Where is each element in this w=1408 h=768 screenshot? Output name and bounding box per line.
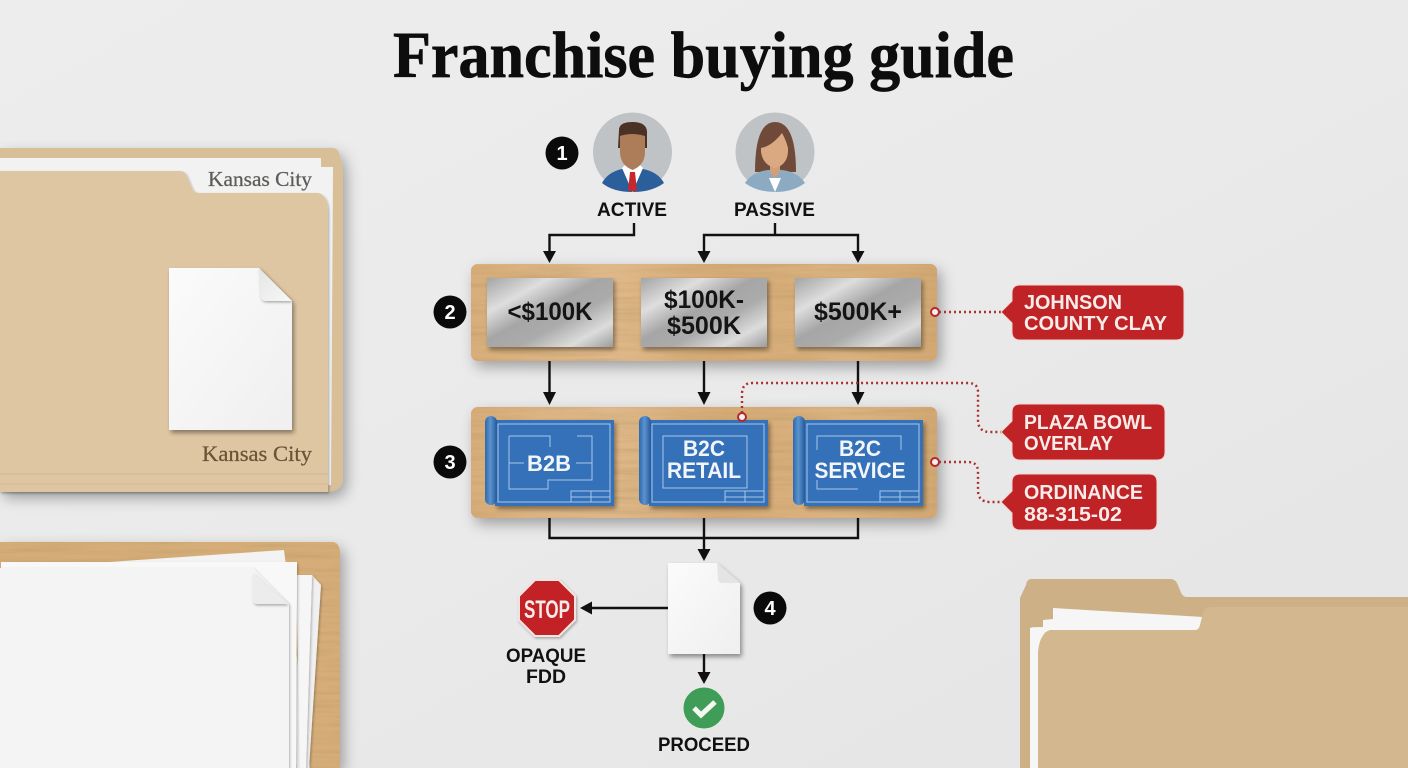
wooden board [471,407,937,518]
callout: Plaza Bowl Overlay: PLAZA BOWL [1024,411,1152,434]
connector dot: model board [931,458,939,466]
callout: Johnson County Clay: JOHNSON [1024,291,1122,314]
connector dot: B2C retail [738,413,746,421]
number badge 4 [754,592,786,624]
arrow: document to stop [580,602,668,614]
blueprint: B2C service [793,416,923,506]
folder tab label: Kansas City [208,167,313,191]
dotted connector: Plaza Bowl Overlay [742,383,1002,432]
icon: active investor avatar [593,112,672,192]
plate: 100K to 500K: $100K- [664,286,744,314]
label: active: ACTIVE [597,199,667,221]
step 4: document decision [506,563,786,756]
blueprint: B2C retail: B2C [683,436,725,461]
step 3: business model board [434,407,937,561]
label: passive: PASSIVE [734,199,815,221]
blueprint: B2C retail [639,416,768,506]
arrows: tiers to business models [543,361,864,405]
plate: under 100K [487,278,613,347]
label: opaque FDD [506,645,586,688]
callout: Johnson County Clay [1001,285,1184,340]
dotted connector: Ordinance [939,462,1002,502]
step 2: investment tier board [434,264,937,405]
arrows: passive to upper tiers [698,223,864,263]
panel: bottom-right manila folder [1020,579,1408,768]
callout: Ordinance 88-315-02 [1001,474,1157,530]
callout: Plaza Bowl Overlay: OVERLAY [1024,432,1113,455]
label: opaque FDD: OPAQUE [506,645,586,667]
plate: 500K plus: $500K+ [814,298,902,326]
number badge 1: 1 [556,143,568,165]
callout: Johnson County Clay: COUNTY CLAY [1024,312,1167,335]
arrow: active to under 100K [543,223,634,263]
callout: Ordinance 88-315-02: ORDINANCE [1024,481,1143,504]
step 1: investor type [543,112,864,263]
callout: Ordinance 88-315-02: 88-315-02 [1024,503,1122,526]
plate: 100K to 500K: $500K [667,312,741,340]
number badge 3 [434,446,466,478]
label: opaque FDD: FDD [526,666,566,688]
number badge 2 [434,296,466,328]
icon: green check [683,687,725,729]
panel: top-left manila folder [0,148,343,492]
icon: passive investor avatar [736,112,814,192]
plate: 500K plus [795,278,921,347]
icon: stop sign: STOP [524,596,570,624]
plate: 100K to 500K [641,278,767,347]
icon: disclosure document [668,563,740,654]
blueprint: B2C service: SERVICE [814,458,906,483]
blueprint: B2C service: B2C [839,436,881,461]
number badge 4: 4 [764,598,776,620]
callout: Plaza Bowl Overlay [1001,404,1165,460]
title: Franchise buying guide [393,19,1014,92]
label: proceed: PROCEED [658,734,750,756]
arrow: models merge to document [550,518,858,561]
number badge 2: 2 [444,302,456,324]
number badge 1 [546,136,578,170]
blueprint: B2B [485,416,614,506]
panel: bottom-left wooden folder with papers [0,542,340,768]
icon: page fold [253,573,288,604]
icon: stop sign [519,580,575,636]
connector dot: tier board [931,308,939,316]
number badge 3: 3 [444,452,456,474]
icon: document on folder [169,268,292,430]
arrow: document to proceed [698,654,710,684]
folder bottom label: Kansas City [202,441,312,466]
dotted connector: Johnson County Clay [939,311,1002,313]
blueprint: B2B: B2B [527,451,571,476]
blueprint: B2C retail: RETAIL [667,458,741,483]
plate: under 100K: <$100K [508,298,592,326]
wooden board [471,264,937,361]
